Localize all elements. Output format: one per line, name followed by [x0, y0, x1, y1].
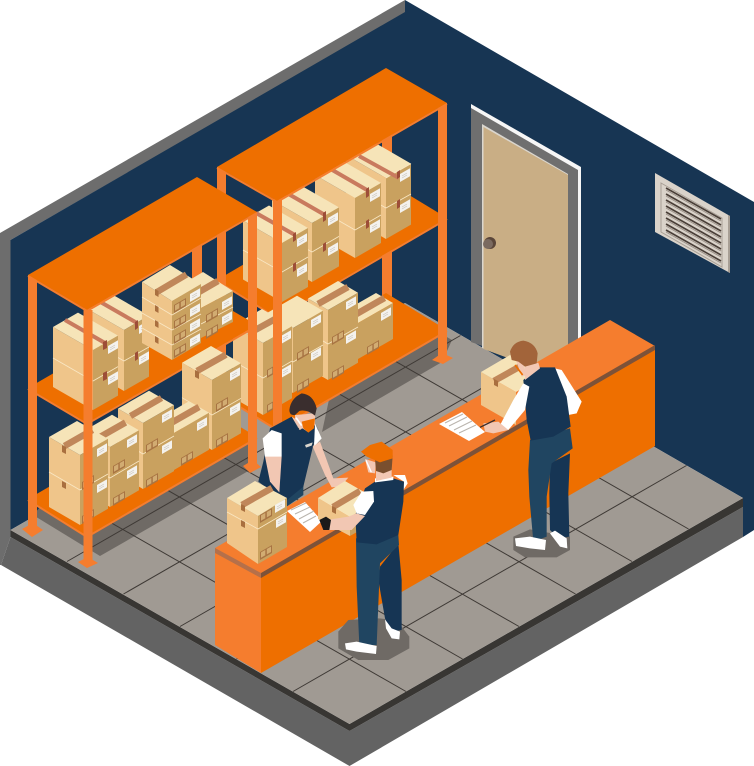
man behind counter: arm on counter [313, 442, 348, 487]
counter [215, 320, 655, 673]
parcel carried by front man [318, 481, 378, 536]
shelving unit: front left [22, 177, 261, 568]
lower boxes [233, 281, 393, 415]
upper boxes [243, 140, 411, 302]
side and front posts [22, 212, 261, 568]
head with cap [361, 442, 393, 482]
wall vent [655, 173, 730, 273]
shelf plates [28, 290, 257, 537]
right wall [405, 0, 754, 537]
top plate [217, 68, 447, 202]
door knob [483, 237, 496, 249]
parcel behind right man [481, 355, 545, 425]
right man writing [480, 341, 582, 557]
left wall [0, 0, 405, 565]
parcel on counter [227, 481, 287, 564]
paper on counter right [439, 412, 485, 441]
man behind counter: body [258, 393, 322, 507]
top plate [28, 177, 257, 311]
shelving unit: back right [217, 68, 453, 460]
head [289, 393, 317, 433]
floor [10, 303, 743, 724]
door [471, 104, 581, 380]
shelf plates [217, 181, 447, 430]
front man [319, 442, 409, 660]
lower boxes [49, 346, 241, 525]
room base [1, 498, 743, 766]
back post [192, 190, 202, 410]
back post [382, 80, 392, 300]
side and front posts [217, 103, 453, 460]
head [510, 341, 540, 380]
upper boxes [53, 265, 233, 410]
shelf shadows on floor [33, 310, 452, 556]
paper on counter left [287, 502, 322, 532]
